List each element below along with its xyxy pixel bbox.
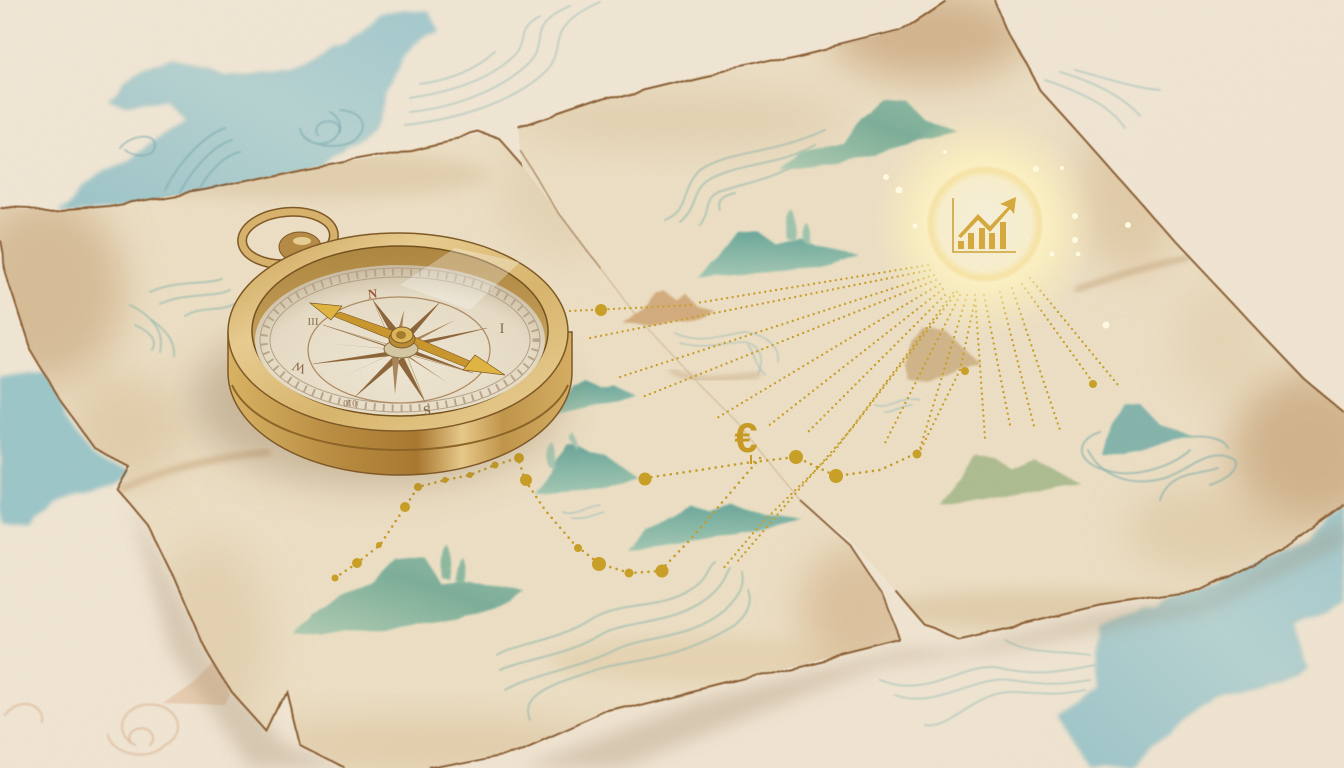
waves drawn on the map — [130, 130, 1236, 720]
mountain: large green, lower left — [293, 544, 525, 634]
waves: left sheet — [130, 279, 234, 356]
compass top rim — [228, 233, 568, 431]
mountain: teal, center — [535, 433, 640, 494]
sun glow — [873, 112, 1097, 336]
compass shadow — [190, 315, 560, 485]
mountain: tan, near route — [624, 290, 715, 325]
icon: glowing circle with growth chart — [927, 166, 1043, 282]
compass ring — [240, 208, 336, 268]
compass rose — [313, 300, 487, 402]
chart bars — [958, 222, 1006, 249]
waves: around right-hand hill — [1082, 432, 1236, 500]
stain: top corner of sheet — [830, 0, 1030, 80]
island: bottom-right blue sea — [1058, 505, 1344, 768]
compass needle — [310, 303, 505, 375]
compass — [190, 208, 572, 485]
dial letters: 010 — [343, 398, 357, 408]
dial tick ring — [260, 268, 540, 412]
mountain: ochre rock — [905, 328, 982, 382]
waves: center crease — [675, 332, 778, 375]
mountain: teal, right — [1102, 404, 1193, 455]
dial letters: N — [367, 286, 379, 301]
dial letters: III — [308, 316, 319, 328]
mountain: teal, long low — [627, 503, 802, 550]
compass inner wall — [252, 246, 548, 416]
dial letters — [290, 286, 504, 419]
waves: lower left sheet — [497, 562, 750, 720]
compass hub — [384, 327, 418, 358]
island: left blue sea — [0, 373, 128, 525]
glass reflection — [400, 248, 520, 310]
dial letters: W — [290, 357, 308, 376]
golden route paths with waypoints — [332, 304, 1097, 582]
icon: euro symbol: € — [734, 414, 758, 461]
mountain: teal, beside compass — [555, 380, 636, 415]
compass body — [228, 332, 572, 475]
compass dial — [255, 265, 545, 415]
fold crease between sheets — [520, 150, 900, 640]
mountain: green, top right — [780, 100, 958, 171]
stain: upper-left sheet edge — [0, 195, 125, 385]
waves: top of right sheet — [665, 130, 825, 225]
panel: right map sheet — [516, 0, 1344, 641]
map shadow — [130, 500, 1344, 768]
chart rising arrow — [958, 197, 1016, 238]
dial letters: I — [500, 321, 504, 337]
dial letters: S — [422, 402, 432, 419]
golden route rays — [570, 265, 1118, 570]
panel: left map sheet — [0, 128, 902, 768]
mountain: olive, lower right — [939, 455, 1080, 504]
dial inner circle — [308, 297, 490, 403]
mountain: teal, upper center — [697, 210, 858, 277]
island: top-left blue sea — [58, 11, 433, 208]
sparkles around the sun — [883, 150, 1131, 328]
chart axes — [953, 198, 1016, 252]
faint tan blot at lower left — [163, 660, 230, 705]
